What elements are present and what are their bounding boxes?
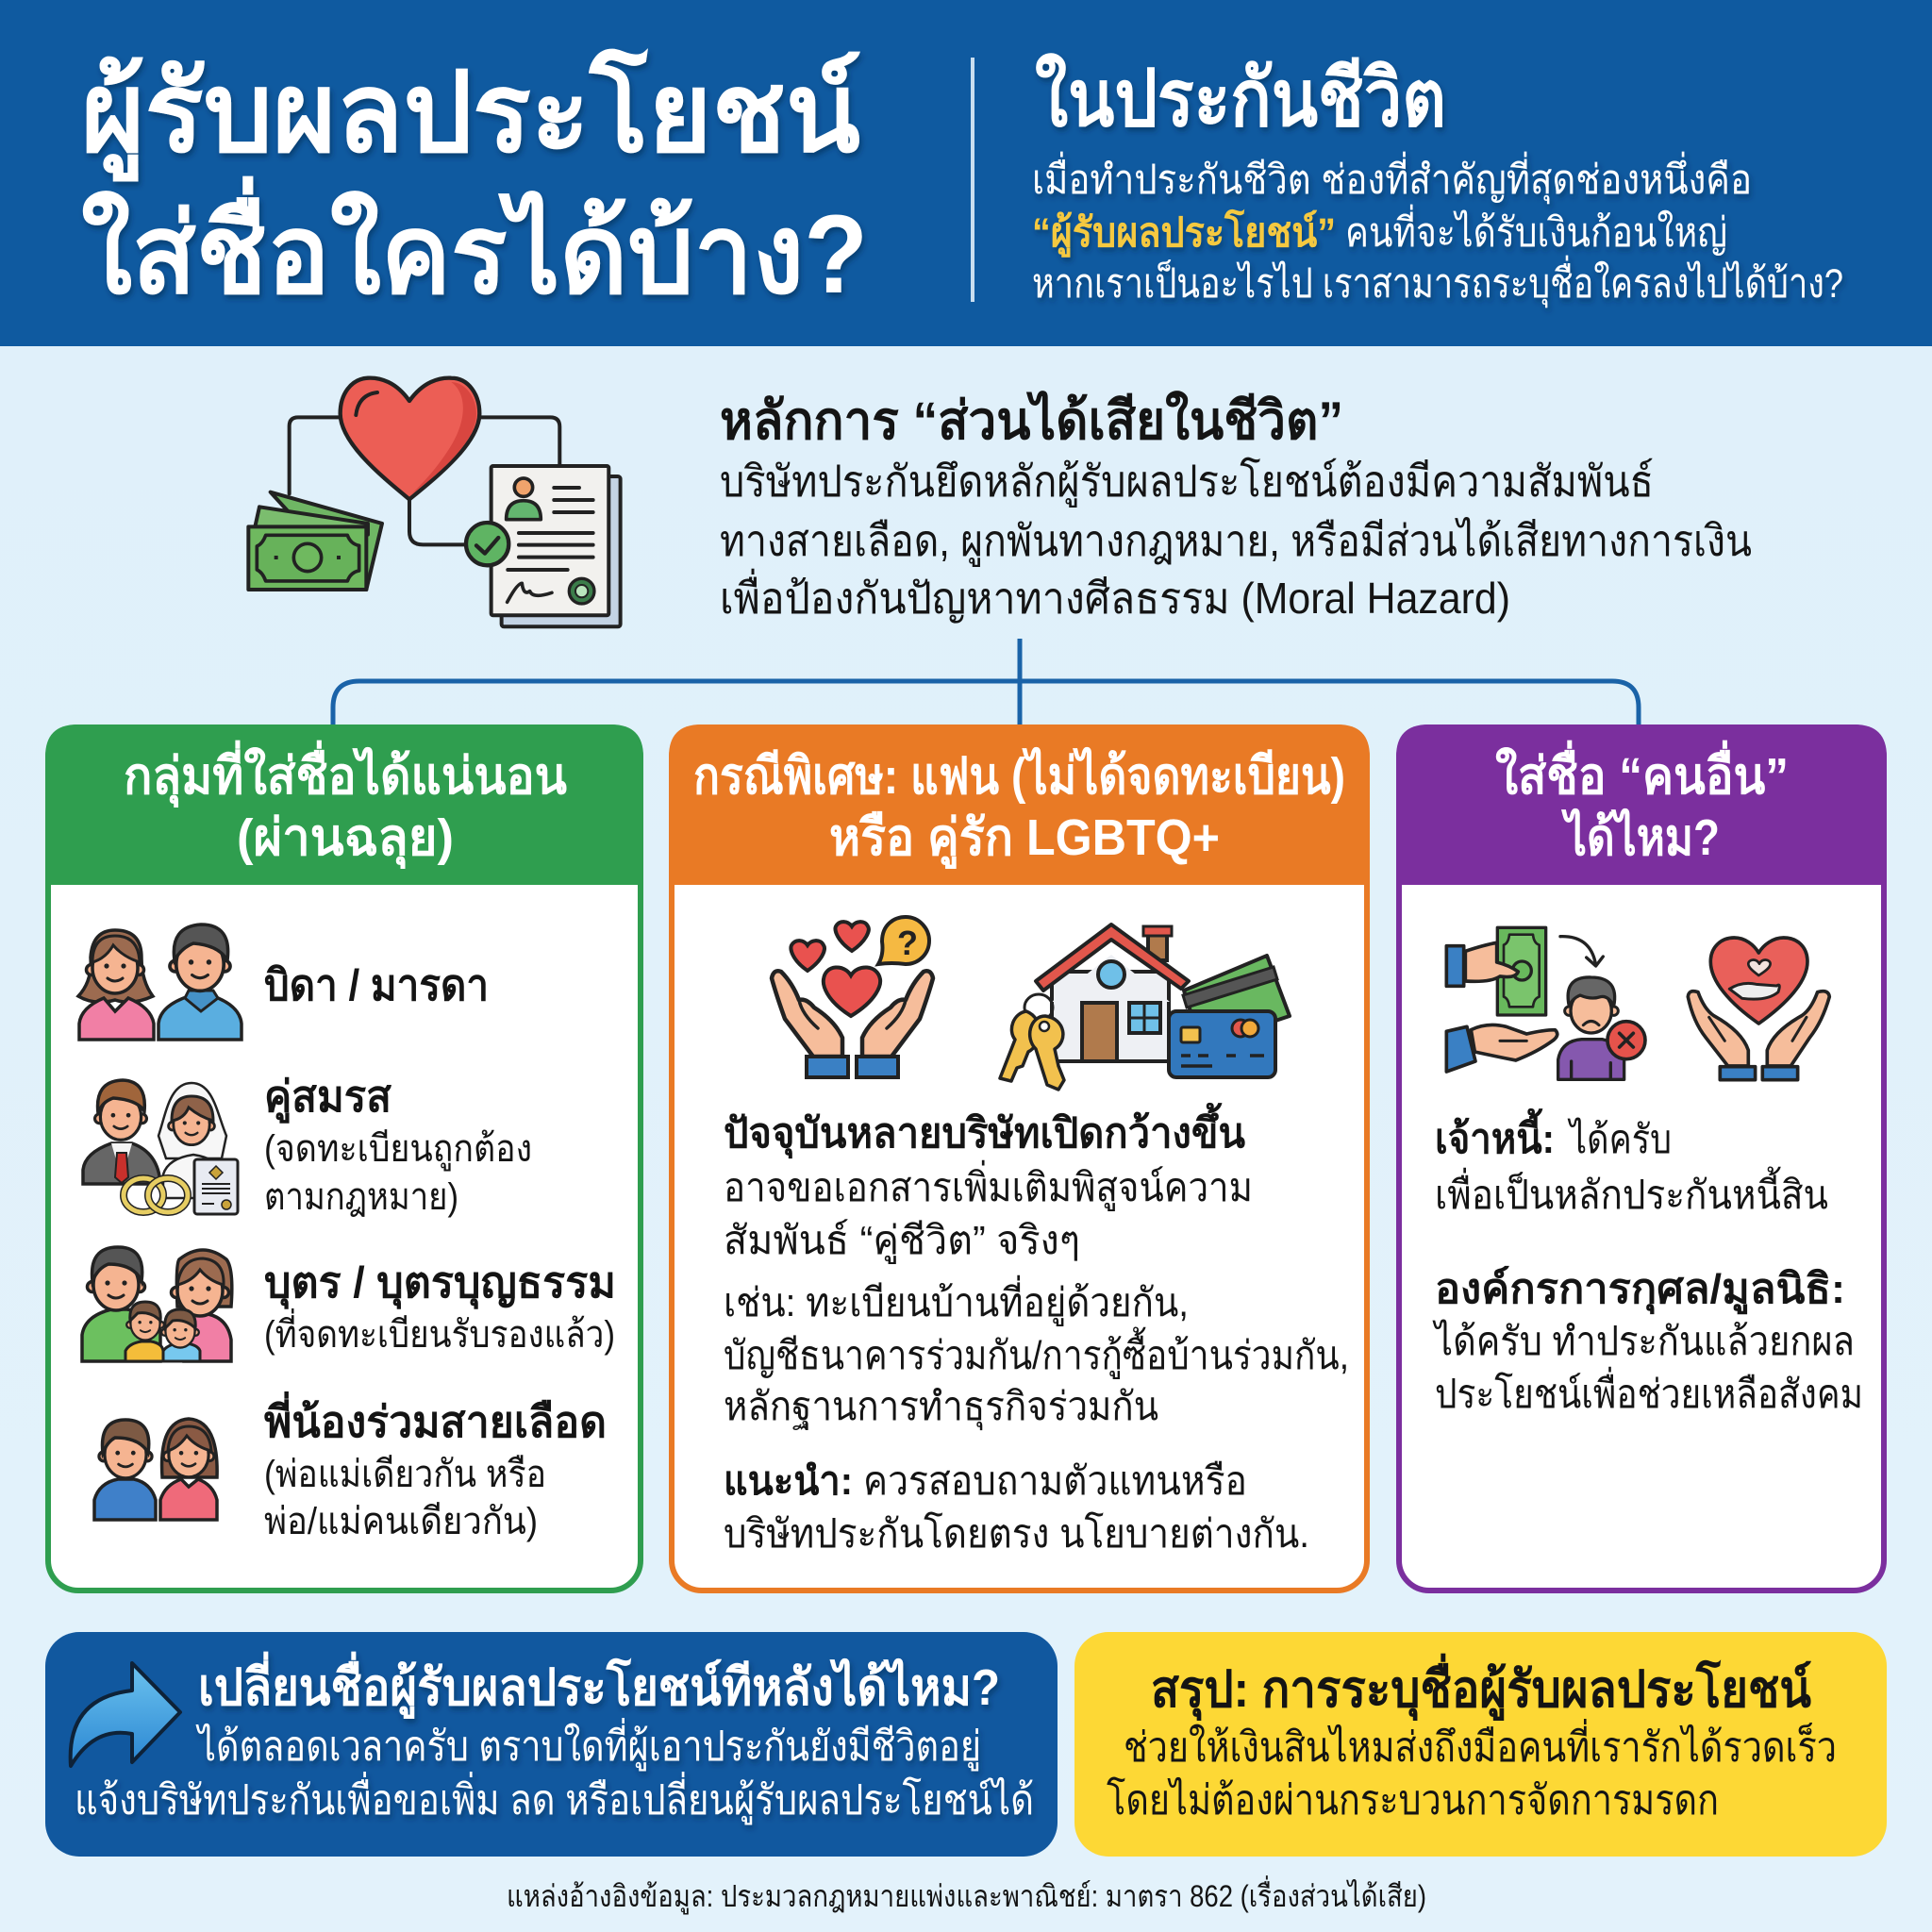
- header intro text: คนที่จะได้รับเงินก้อนใหญ่: [1345, 205, 1727, 256]
- principle body: ทางสายเลือด, ผูกพันทางกฎหมาย, หรือมีส่วนได้เสียทางการเงิน: [720, 516, 1752, 567]
- orange panel body text: บัญชีธนาคารร่วมกัน/การกู้ซื้อบ้านร่วมกัน,: [724, 1326, 1349, 1379]
- purple panel body text: องค์กรการกุศล/มูลนิธิ:: [1435, 1265, 1845, 1315]
- icon: hands holding hearts with question bubble: ?: [897, 924, 918, 962]
- icon: creditor receiving money: [1446, 927, 1645, 1079]
- label: siblings: พี่น้องร่วมสายเลือด: [264, 1391, 607, 1446]
- title: [81, 48, 868, 317]
- icon: siblings: [94, 1419, 217, 1520]
- purple panel heading: ใส่ชื่อ “คนอื่น”: [1495, 740, 1789, 805]
- label: spouse: คู่สมรส: [264, 1072, 392, 1124]
- principle body: [720, 457, 1752, 623]
- header divider: [971, 58, 974, 302]
- icon: hands holding charity heart: [1688, 938, 1829, 1080]
- purple panel body text: เพื่อเป็นหลักประกันหนี้สิน: [1435, 1166, 1828, 1217]
- icon: hands holding hearts with question bubble: [772, 917, 933, 1077]
- label: spouse: ตามกฎหมาย): [264, 1176, 458, 1218]
- label: parents: บิดา / มารดา: [264, 960, 489, 1009]
- orange panel heading: [693, 746, 1345, 869]
- orange panel heading: กรณีพิเศษ: แฟน (ไม่ได้จดทะเบียน): [693, 746, 1345, 805]
- blue callout text: [75, 1651, 1034, 1825]
- purple panel heading: ได้ไหม?: [1561, 808, 1720, 866]
- purple panel body text: เจ้าหนี้:: [1435, 1108, 1555, 1162]
- header band: [0, 0, 1932, 346]
- header intro text: เมื่อทำประกันชีวิต ช่องที่สำคัญที่สุดช่องหนึ่งคือ: [1032, 152, 1752, 205]
- label: siblings: [264, 1391, 607, 1542]
- callout: summary (yellow): [1074, 1632, 1887, 1857]
- principle body: เพื่อป้องกันปัญหาทางศีลธรรม (Moral Hazard): [720, 568, 1510, 623]
- yellow callout text: ช่วยให้เงินสินไหมส่งถึงมือคนที่เรารักได้รวดเร็ว: [1124, 1718, 1837, 1771]
- purple panel body text: [1432, 1108, 1863, 1416]
- icon: house, keys and credit cards: [1000, 924, 1290, 1090]
- yellow callout text: [1107, 1653, 1837, 1824]
- green panel heading: กลุ่มที่ใส่ชื่อได้แน่นอน: [124, 740, 567, 808]
- icon: parents: [78, 924, 242, 1040]
- orange panel body text: หลักฐานการทำธุรกิจร่วมกัน: [724, 1384, 1158, 1431]
- label: children: (ที่จดทะเบียนรับรองแล้ว): [264, 1308, 615, 1356]
- blue callout text: แจ้งบริษัทประกันเพื่อขอเพิ่ม ลด หรือเปลี่ยนผู้รับผลประโยชน์ได้: [75, 1771, 1034, 1825]
- green panel heading: [124, 740, 567, 870]
- label: children: [264, 1257, 616, 1356]
- icon: family with children: [82, 1247, 232, 1361]
- callout: change beneficiary (blue): [45, 1632, 1058, 1857]
- label: spouse: [264, 1072, 532, 1218]
- blue callout text: ได้ตลอดเวลาครับ ตราบใดที่ผู้เอาประกันยังมีชีวิตอยู่: [195, 1717, 981, 1772]
- principle text block: [720, 390, 1752, 623]
- purple panel heading: [1495, 740, 1789, 866]
- green panel heading: (ผ่านฉลุย): [237, 809, 454, 870]
- orange panel body text: ปัจจุบันหลายบริษัทเปิดกว้างขึ้น: [724, 1102, 1245, 1159]
- orange panel body text: สัมพันธ์ “คู่ชีวิต” จริงๆ: [724, 1218, 1080, 1264]
- yellow callout text: โดยไม่ต้องผ่านกระบวนการจัดการมรดก: [1107, 1776, 1719, 1824]
- connector lines from principle to three panels: [333, 639, 1639, 724]
- orange panel body text: [724, 1102, 1349, 1556]
- orange panel body text: เช่น: ทะเบียนบ้านที่อยู่ด้วยกัน,: [724, 1275, 1189, 1326]
- blue callout text: เปลี่ยนชื่อผู้รับผลประโยชน์ทีหลังได้ไหม?: [198, 1651, 1000, 1719]
- orange panel body text: ควรสอบถามตัวแทนหรือ: [863, 1458, 1247, 1503]
- subtitle: ในประกันชีวิต: [1035, 53, 1446, 142]
- label: children: บุตร / บุตรบุญธรรม: [264, 1257, 616, 1309]
- title: ผู้รับผลประโยชน์: [81, 48, 860, 182]
- header intro text: [1032, 152, 1843, 308]
- panel: others (purple): [1396, 724, 1887, 1591]
- label: siblings: (พ่อแม่เดียวกัน หรือ: [264, 1454, 546, 1495]
- icon: heart linking money and policy document: [248, 378, 621, 626]
- orange panel body text: อาจขอเอกสารเพิ่มเติมพิสูจน์ความ: [724, 1160, 1253, 1211]
- panel: special case (orange): [669, 724, 1370, 1591]
- orange panel body text: แนะนำ:: [724, 1458, 853, 1503]
- purple panel body text: ประโยชน์เพื่อช่วยเหลือสังคม: [1435, 1367, 1863, 1416]
- purple panel body text: ได้ครับ: [1567, 1117, 1672, 1161]
- source footer: แหล่งอ้างอิงข้อมูล: ประมวลกฎหมายแพ่งและพาณิชย์: มาตรา 862 (เรื่องส่วนได้เสีย): [507, 1875, 1426, 1915]
- title: ใส่ชื่อใครได้บ้าง?: [81, 176, 868, 317]
- yellow callout text: สรุป: การระบุชื่อผู้รับผลประโยชน์: [1151, 1653, 1812, 1722]
- label: spouse: (จดทะเบียนถูกต้อง: [264, 1128, 532, 1171]
- orange panel heading: หรือ คู่รัก LGBTQ+: [829, 809, 1220, 869]
- icon: married couple with rings and certificate: [83, 1080, 238, 1214]
- principle heading: หลักการ “ส่วนได้เสียในชีวิต”: [720, 390, 1343, 450]
- orange panel body text: บริษัทประกันโดยตรง นโยบายต่างกัน.: [724, 1510, 1309, 1556]
- label: siblings: พ่อ/แม่คนเดียวกัน): [264, 1501, 538, 1542]
- icon: curved arrow: [71, 1663, 180, 1766]
- purple panel body text: ได้ครับ ทำประกันแล้วยกผล: [1432, 1319, 1855, 1363]
- principle body: บริษัทประกันยึดหลักผู้รับผลประโยชน์ต้องมีความสัมพันธ์: [720, 457, 1654, 508]
- panel: certain group (green): [45, 724, 643, 1591]
- header intro text: “ผู้รับผลประโยชน์”: [1032, 208, 1336, 258]
